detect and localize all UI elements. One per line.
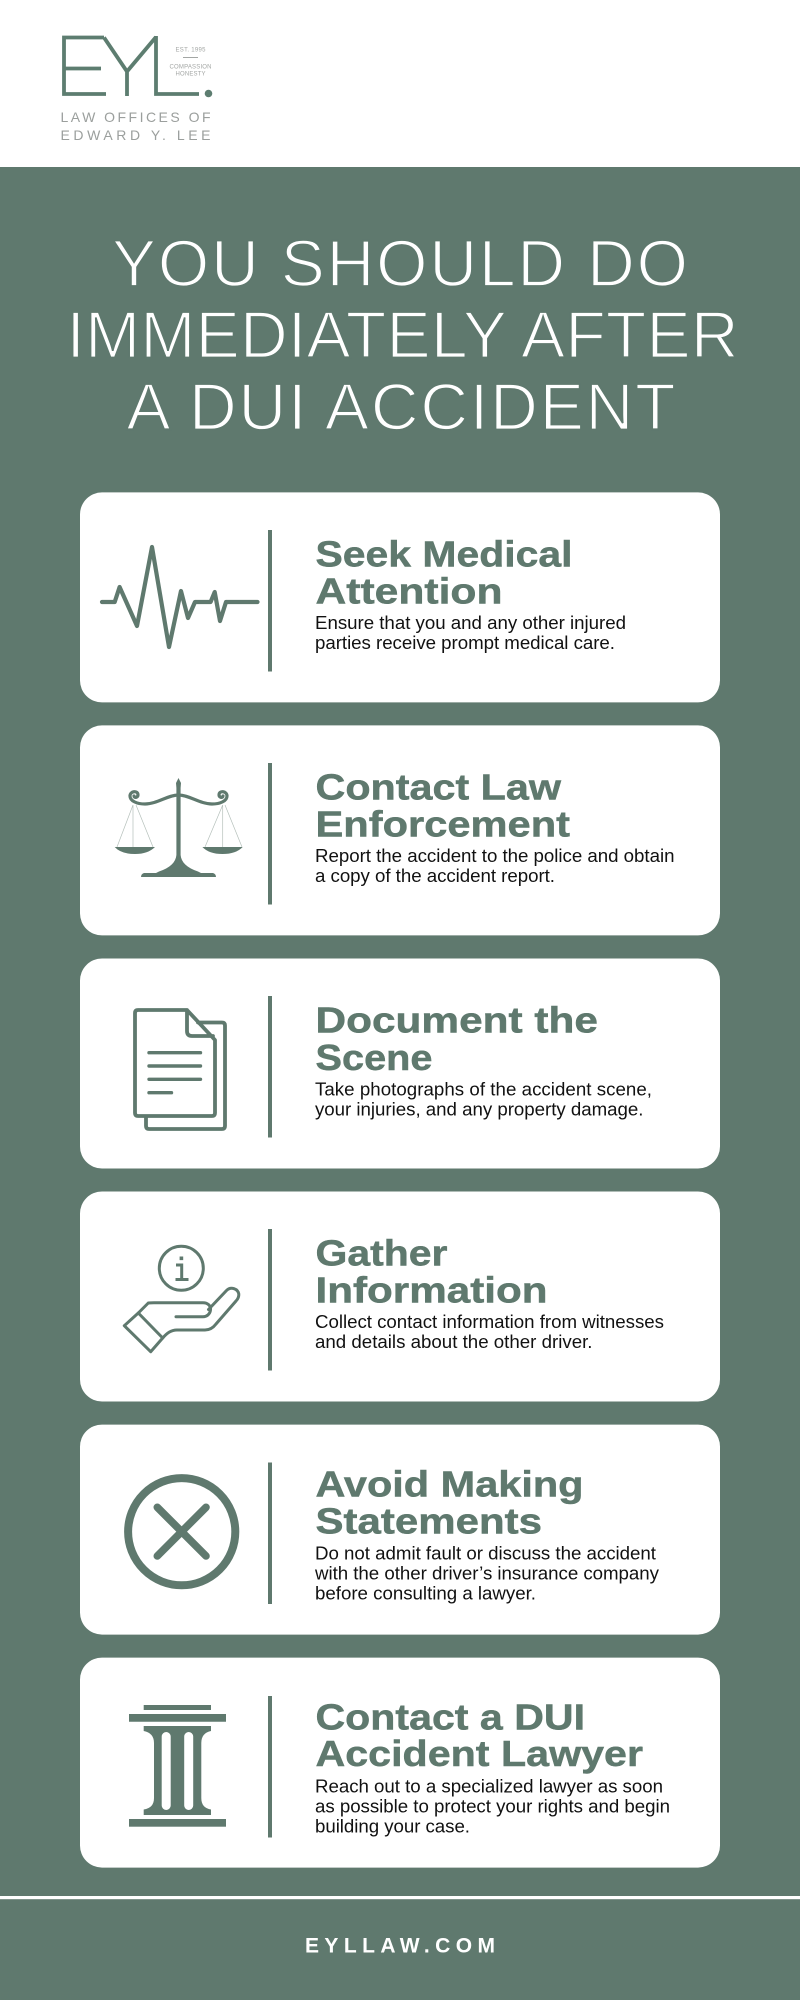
body text [315, 845, 674, 886]
title: IMMEDIATELY AFTER [66, 298, 738, 372]
logo tagline: COMPASSION [170, 64, 212, 70]
body text [315, 1311, 664, 1352]
front page [135, 1010, 215, 1116]
circle [128, 1478, 235, 1585]
column base [129, 1819, 226, 1827]
heading: Gather [316, 1233, 448, 1274]
logo dot [205, 90, 212, 97]
logo name [60, 109, 210, 143]
title: YOU SHOULD DO [112, 226, 688, 300]
icon: column [129, 1705, 226, 1827]
icon: heartbeat [102, 547, 258, 647]
body text: Do not admit fault or discuss the accident [315, 1542, 657, 1563]
logo tagline: HONESTY [176, 72, 206, 78]
scale stand [141, 778, 216, 877]
footer url: EYLLAW.COM [305, 1935, 495, 1958]
heading: Contact Law [316, 767, 562, 808]
heading [316, 767, 570, 844]
logo tagline: EST. 1995 [176, 48, 206, 54]
heading: Seek Medical [316, 534, 572, 575]
logo monogram [64, 36, 199, 96]
footer rule [0, 1896, 800, 1899]
body text [315, 1078, 652, 1119]
card background [80, 1192, 720, 1402]
icon: scales of justice [115, 778, 243, 877]
title: A DUI ACCIDENT [126, 370, 676, 444]
heading: Information [316, 1270, 548, 1311]
heading: Document the [316, 1000, 598, 1041]
logo name: EDWARD Y. LEE [60, 127, 210, 143]
hand cuff [124, 1313, 163, 1352]
header band [0, 0, 800, 167]
info circle [159, 1246, 203, 1290]
title [66, 226, 738, 444]
body text [315, 1775, 670, 1836]
back page [146, 1022, 225, 1129]
body text [315, 612, 626, 653]
card background [80, 1425, 720, 1635]
body text: Take photographs of the accident scene, [315, 1078, 652, 1099]
card background [80, 492, 720, 702]
heading [316, 1696, 643, 1774]
divider [268, 763, 272, 904]
body text: Ensure that you and any other injured [315, 612, 626, 633]
heading: Contact a DUI [316, 1696, 585, 1737]
scale strings [117, 805, 242, 847]
panel: gather information [80, 1192, 720, 1402]
panel: document the scene [80, 958, 720, 1168]
panel: avoid making statements [80, 1425, 720, 1635]
divider [268, 530, 272, 672]
logo name: LAW OFFICES OF [60, 109, 210, 125]
body text: a copy of the accident report. [315, 865, 555, 886]
logo tagline [170, 48, 212, 78]
heading [316, 1000, 598, 1078]
icon: documents [135, 1010, 225, 1129]
body text: your injuries, and any property damage. [315, 1098, 644, 1119]
cross [157, 1507, 206, 1556]
body text [314, 1542, 660, 1603]
card background [80, 725, 720, 935]
divider [268, 1462, 272, 1604]
info letter [176, 1256, 188, 1281]
body text: before consulting a lawyer. [315, 1582, 536, 1603]
body text: with the other driver’s insurance company [314, 1562, 660, 1583]
heading: Accident Lawyer [316, 1733, 643, 1774]
heading [316, 1233, 548, 1311]
scale beam [130, 792, 227, 804]
body text: parties receive prompt medical care. [315, 632, 615, 653]
body text: as possible to protect your rights and begin [315, 1795, 670, 1816]
heading [316, 534, 572, 611]
heading: Enforcement [316, 803, 570, 844]
body text: and details about the other driver. [315, 1331, 592, 1352]
body text: Reach out to a specialized lawyer as soon [315, 1775, 663, 1796]
icon: circled x [128, 1478, 235, 1585]
column top bars [129, 1705, 226, 1722]
heading [316, 1464, 584, 1541]
column flutes [162, 1732, 193, 1810]
card background [80, 958, 720, 1168]
heading: Scene [316, 1037, 432, 1078]
panel: contact a dui accident lawyer [80, 1658, 720, 1868]
divider [268, 996, 272, 1138]
panel: contact law enforcement [80, 725, 720, 935]
heading: Avoid Making [316, 1464, 584, 1505]
panel: seek medical attention [80, 492, 720, 702]
divider [268, 1229, 272, 1370]
body text: building your case. [315, 1815, 470, 1836]
text lines [149, 1053, 200, 1093]
heading: Attention [316, 570, 502, 611]
heading: Statements [316, 1500, 542, 1541]
body text: Report the accident to the police and obtain [315, 845, 674, 866]
column shaft [144, 1726, 211, 1815]
card background [80, 1658, 720, 1868]
icon: hand with info [124, 1246, 239, 1352]
logo: EYL law offices [60, 36, 212, 143]
scale pans [115, 847, 243, 854]
divider [268, 1696, 272, 1838]
body text: Collect contact information from witnesses [315, 1311, 664, 1332]
hand outline [138, 1288, 239, 1338]
